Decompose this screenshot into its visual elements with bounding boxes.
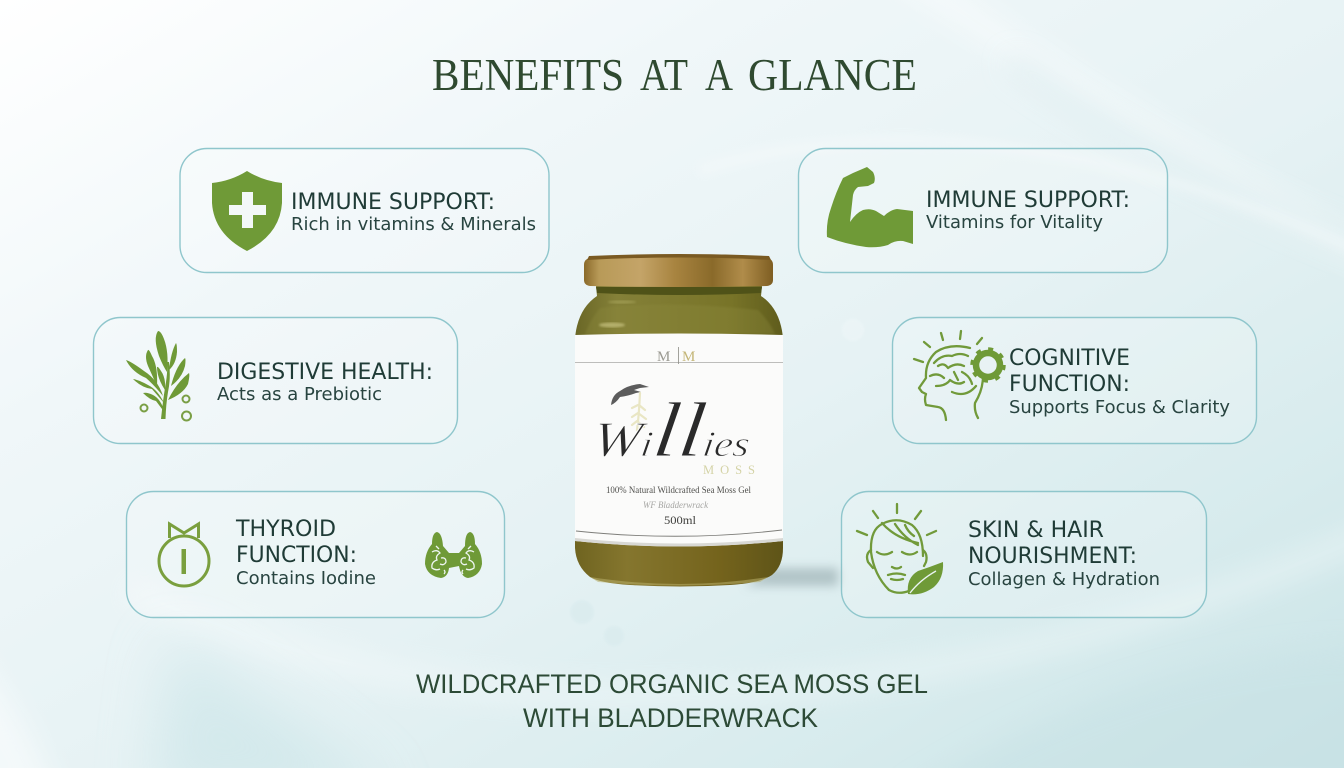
description: Rich in vitamins & Minerals — [291, 214, 536, 235]
label monogram — [657, 347, 695, 365]
label hand and sprig — [611, 384, 649, 430]
title — [432, 50, 917, 100]
title: A — [705, 50, 733, 100]
label brand script: Willies — [589, 386, 758, 473]
label monogram: M — [657, 349, 670, 365]
icon: shield with cross — [212, 171, 282, 251]
label product name: 100% Natural Wildcrafted Sea Moss Gel — [606, 485, 751, 495]
heading line two: NOURISHMENT: — [968, 544, 1137, 569]
title: AT — [640, 50, 688, 100]
description: Vitamins for Vitality — [926, 212, 1103, 233]
heading line two: FUNCTION: — [236, 543, 357, 568]
jar label — [575, 334, 783, 546]
icon: face with leaf — [857, 504, 943, 594]
label moss: MOSS — [703, 463, 755, 477]
icon: iodine medal — [159, 524, 209, 586]
heading: THYROID — [235, 517, 336, 542]
icon: thyroid gland — [425, 532, 482, 578]
description: Contains Iodine — [236, 568, 376, 589]
label volume: 500ml — [664, 515, 696, 527]
label bladderwrack note: WF Bladderwrack — [643, 501, 709, 511]
description: Collagen & Hydration — [968, 569, 1160, 590]
icon: seaweed — [126, 331, 191, 420]
jar lid — [584, 256, 773, 287]
panel: cognitive function — [892, 318, 1256, 444]
heading: IMMUNE SUPPORT: — [926, 188, 1130, 213]
description: Supports Focus & Clarity — [1009, 397, 1230, 418]
heading: DIGESTIVE HEALTH: — [217, 360, 433, 385]
title: GLANCE — [748, 50, 917, 100]
bottom tagline: WITH BLADDERWRACK — [523, 703, 818, 733]
panel: digestive health — [94, 318, 458, 444]
heading: IMMUNE SUPPORT: — [291, 190, 495, 215]
description: Acts as a Prebiotic — [217, 384, 382, 405]
bottom tagline — [416, 669, 928, 733]
heading line two: FUNCTION: — [1009, 372, 1130, 397]
title: BENEFITS — [432, 50, 624, 100]
bottom tagline: WILDCRAFTED ORGANIC SEA MOSS GEL — [416, 669, 928, 699]
icon: brain with gear — [914, 331, 1004, 420]
heading: COGNITIVE — [1009, 346, 1130, 371]
panel: skin and hair nourishment — [842, 492, 1206, 618]
jar glass and gel — [575, 286, 783, 541]
panel: immune support, vitamins for vitality — [798, 148, 1168, 272]
label monogram: M — [682, 349, 695, 365]
heading: SKIN & HAIR — [968, 518, 1104, 543]
product jar — [575, 254, 838, 586]
panel: immune support, vitamins and minerals — [180, 148, 549, 272]
panel: thyroid function — [126, 492, 504, 618]
icon: flexed arm — [827, 167, 913, 247]
